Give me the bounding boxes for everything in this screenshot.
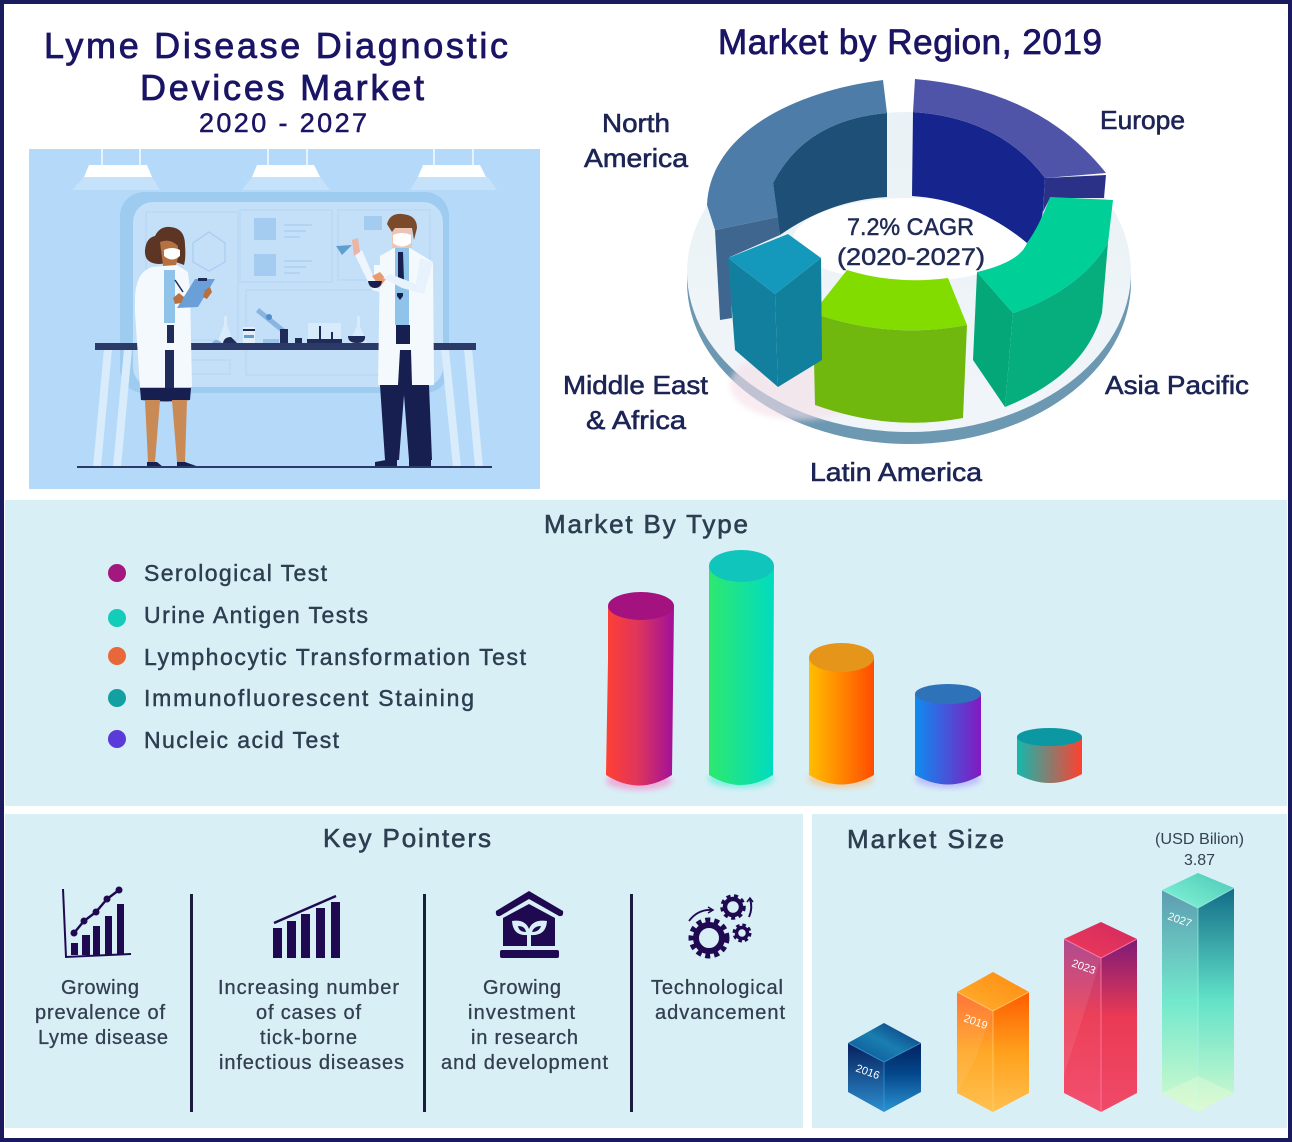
CAGR label: 7.2% CAGR xyxy=(847,214,974,241)
text: increasing number of cases xyxy=(218,977,404,1074)
title: Lyme Disease Diagnostic xyxy=(44,25,508,66)
text: technological advancement: Technological xyxy=(651,977,783,999)
label: Europe: Europe xyxy=(1100,105,1185,135)
segment: Europe xyxy=(912,79,1106,243)
bar: 2023: 2023 xyxy=(1070,958,1097,977)
heading: key pointers: Key Pointers xyxy=(323,823,491,853)
unit and value label: 3.87 xyxy=(1184,852,1215,869)
label: Asia Pacific: Asia Pacific xyxy=(1105,370,1249,400)
label: Middle East and Africa: & Africa xyxy=(586,405,687,435)
text: growing investment: in research xyxy=(471,1027,578,1049)
3D donut chart: market by region xyxy=(687,79,1131,444)
lab screen xyxy=(120,192,449,393)
floor line xyxy=(77,466,492,468)
text: technological advancement xyxy=(651,977,785,1024)
label: North America: North xyxy=(602,108,670,138)
text: growing prevalence: prevalence of xyxy=(35,1002,165,1024)
cylinder: nucleic acid test xyxy=(1017,728,1082,783)
text: growing investment xyxy=(441,977,608,1074)
illustration: scientists in laboratory xyxy=(29,149,540,489)
text: growing investment: and development xyxy=(441,1052,608,1074)
label: North America: America xyxy=(584,143,689,173)
cylinder: serological test xyxy=(606,592,674,790)
text: growing prevalence xyxy=(35,977,168,1049)
title: 2020 - 2027 xyxy=(199,108,367,138)
legend list: Serological Test xyxy=(144,560,328,586)
panel: market by type xyxy=(5,500,1287,806)
lab equipment xyxy=(212,308,367,343)
icon: house with plant xyxy=(496,891,563,958)
text: growing investment: Growing xyxy=(483,977,561,999)
text: increasing number of cases: infectious diseases xyxy=(219,1052,404,1074)
label: Middle East and Africa: Middle East xyxy=(563,370,709,400)
title: Devices Market xyxy=(140,67,424,108)
text: growing prevalence: Growing xyxy=(61,977,139,999)
text: increasing number of cases: Increasing number xyxy=(218,977,399,999)
CAGR label xyxy=(837,214,985,271)
icon: growth line chart xyxy=(63,886,131,957)
heading: market size: Market Size xyxy=(847,824,1004,854)
heading: market by type: Market By Type xyxy=(544,509,748,539)
icon: gears xyxy=(689,896,753,956)
segment: North America xyxy=(707,80,887,320)
cylinder chart xyxy=(606,550,1082,790)
text: growing prevalence: Lyme disease xyxy=(38,1027,168,1049)
text: technological advancement: advancement xyxy=(655,1002,785,1024)
segment: Latin America xyxy=(813,270,967,423)
cylinder: urine antigen tests xyxy=(708,550,774,788)
scientist: man xyxy=(336,214,434,467)
text: increasing number of cases: of cases of xyxy=(256,1002,361,1024)
segment: Middle East and Africa xyxy=(728,234,822,387)
label: North America xyxy=(584,108,689,173)
bar: 2027: 2027 xyxy=(1166,911,1193,930)
scientist: woman xyxy=(135,227,215,467)
label: Latin America: Latin America xyxy=(810,457,983,487)
unit and value label xyxy=(1155,831,1244,869)
legend list: Lymphocytic Transformation Test xyxy=(144,644,527,670)
panel: market size xyxy=(812,814,1287,1128)
cylinder: immunofluorescent staining xyxy=(915,684,981,788)
text: growing investment: investment xyxy=(468,1002,575,1024)
table legs xyxy=(93,349,483,467)
donut base plate xyxy=(687,112,1131,444)
unit and value label: (USD Bilion) xyxy=(1155,831,1244,848)
cylinder: lymphocytic transformation test xyxy=(808,643,874,788)
bar: 2016: 2016 xyxy=(854,1063,881,1082)
legend list: Nucleic acid Test xyxy=(144,727,340,753)
bar: 2016 xyxy=(848,1023,921,1112)
ceiling lamps xyxy=(72,149,497,190)
bar: 2019: 2019 xyxy=(962,1013,989,1032)
legend list: Immunofluorescent Staining xyxy=(144,685,474,711)
text: increasing number of cases: tick-borne xyxy=(260,1027,357,1049)
segment: Asia Pacific xyxy=(973,197,1113,407)
panel: key pointers xyxy=(5,814,803,1128)
legend list: Urine Antigen Tests xyxy=(144,602,368,628)
chart title: market by region: Market by Region, 2019 xyxy=(718,23,1102,62)
icon: rising bars xyxy=(273,896,340,958)
bar: 2023 xyxy=(1064,922,1137,1112)
table top xyxy=(95,343,476,350)
3D bar chart xyxy=(848,873,1234,1112)
bar: 2019 xyxy=(957,972,1029,1112)
dividers xyxy=(192,894,632,1112)
title xyxy=(44,25,508,138)
CAGR label: (2020-2027) xyxy=(837,244,985,271)
legend list xyxy=(108,560,527,753)
label: Middle East and Africa xyxy=(563,370,709,435)
bar: 2027 xyxy=(1162,873,1234,1112)
